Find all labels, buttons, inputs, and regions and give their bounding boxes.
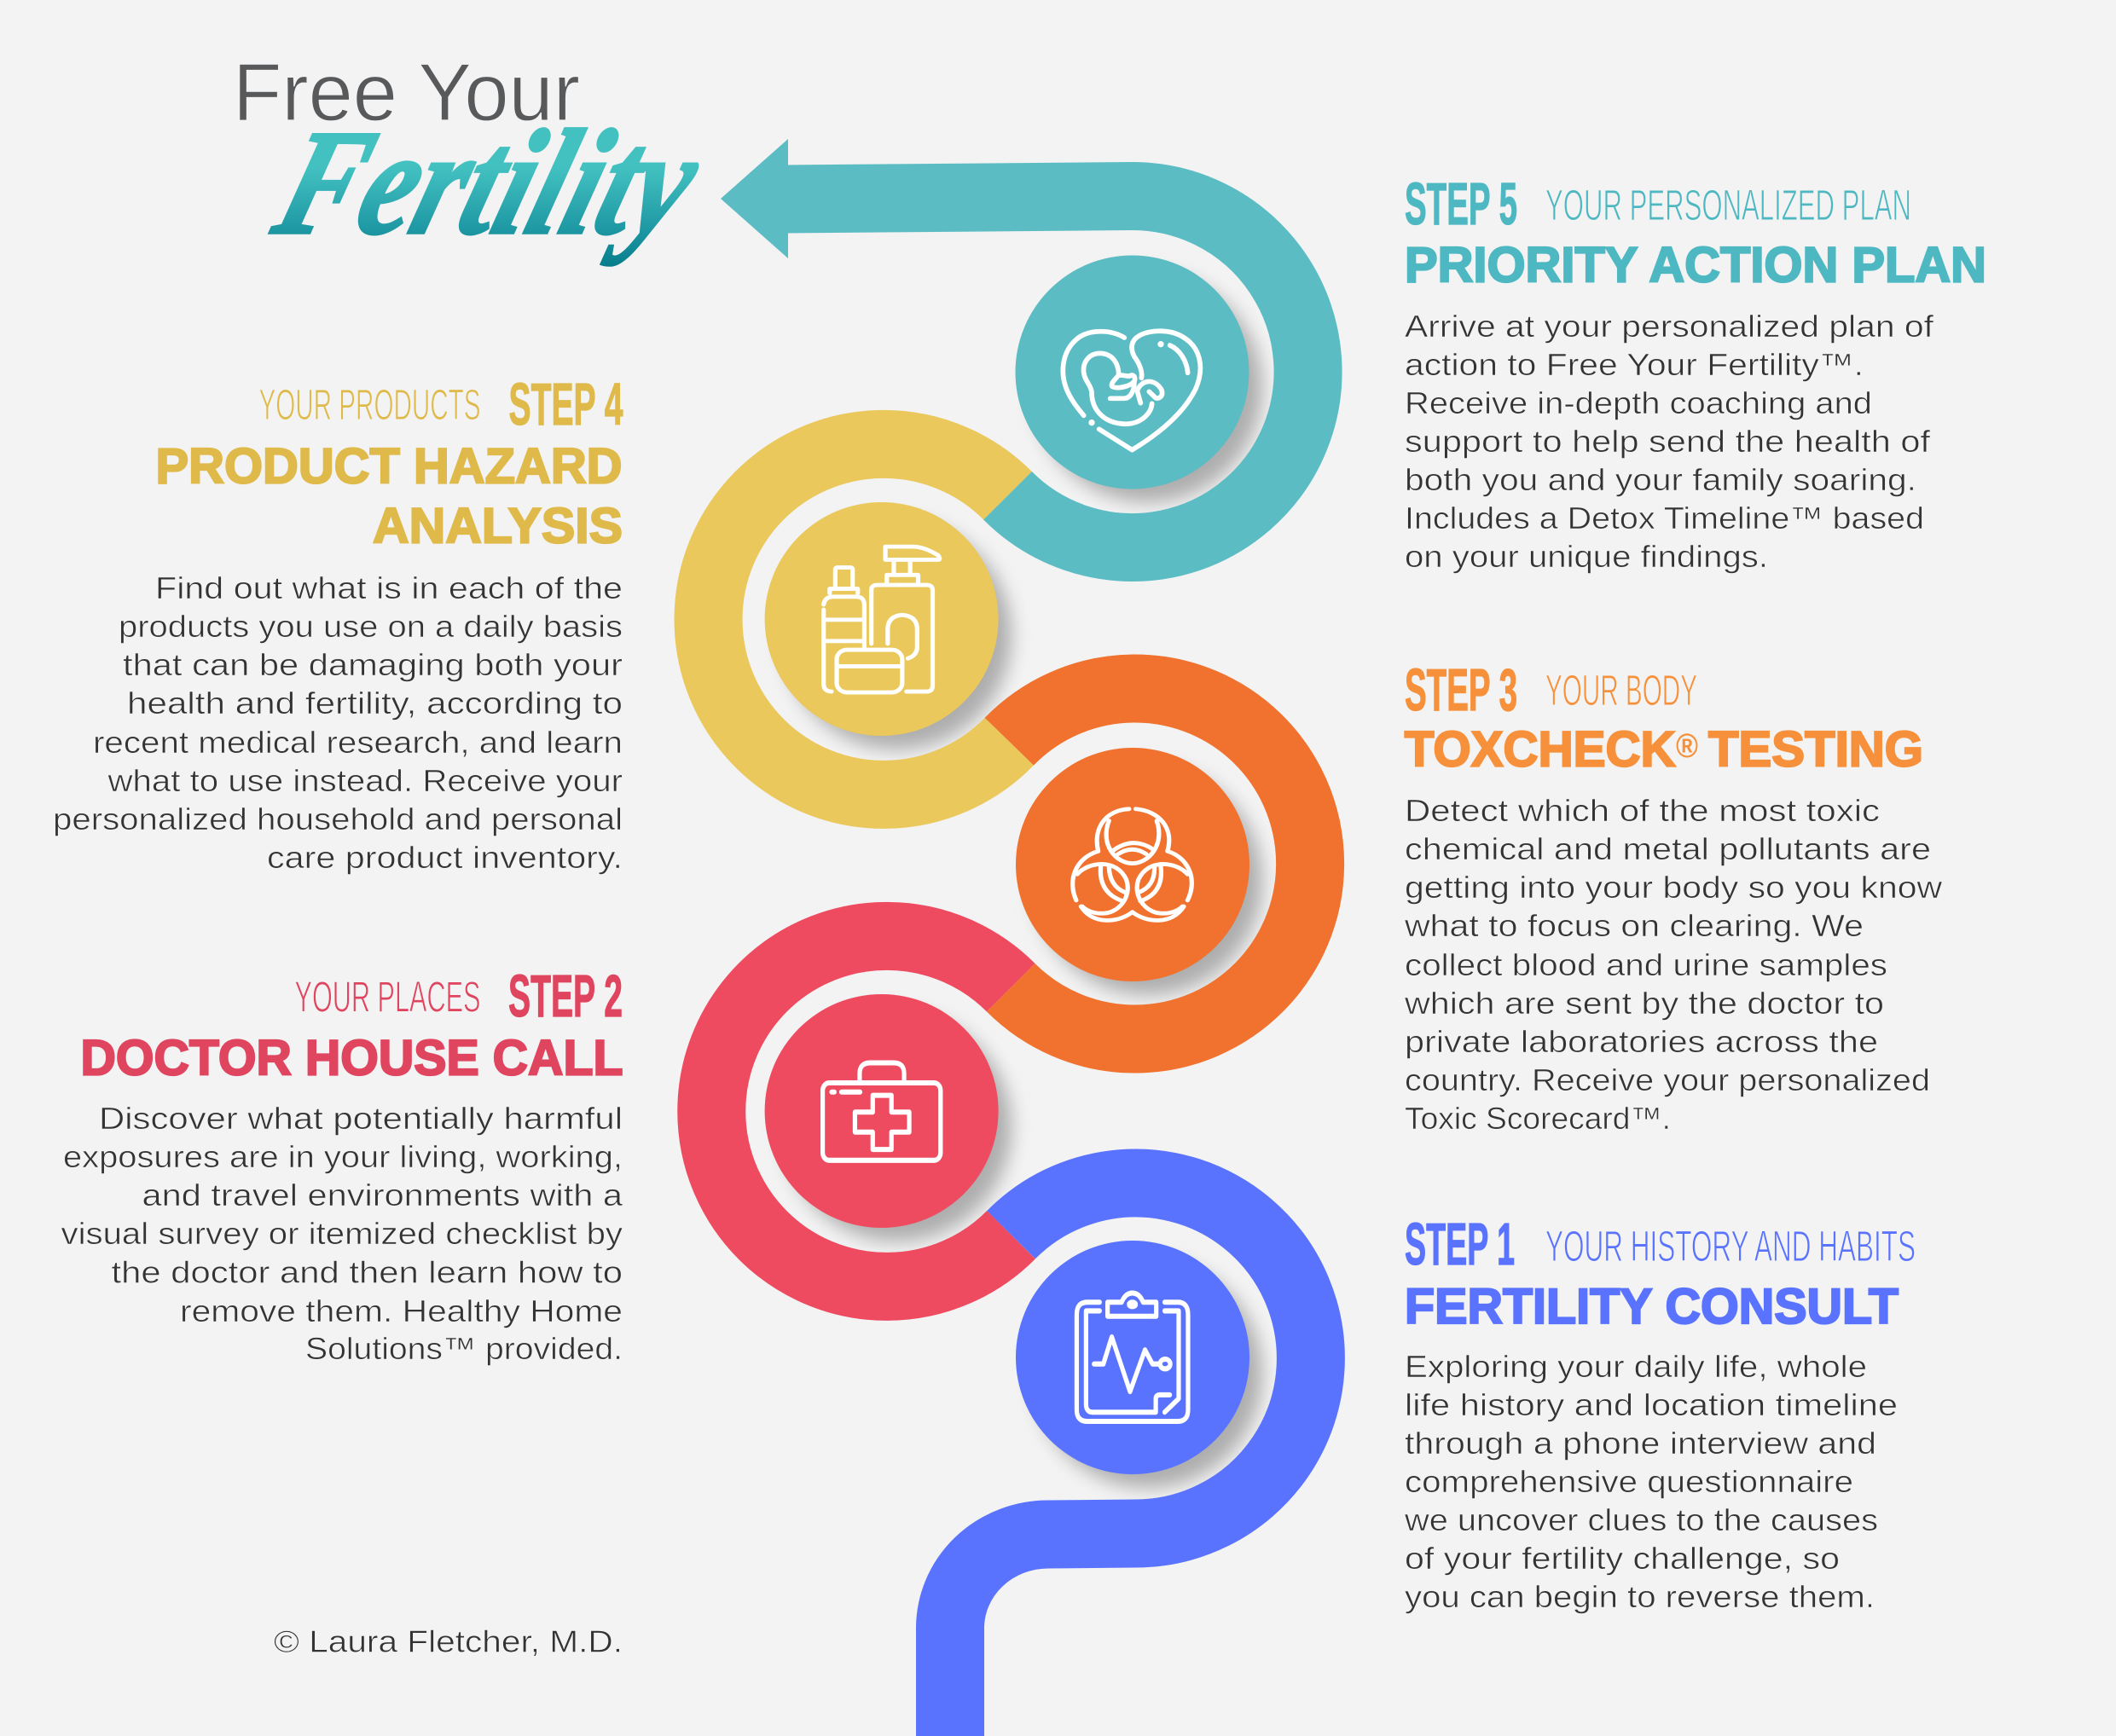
step description: support to help send the health of <box>1405 424 1931 459</box>
step description: Toxic Scorecard™. <box>1405 1101 1671 1136</box>
step description: you can begin to reverse them. <box>1405 1579 1875 1614</box>
path segment: step 3 orange <box>1009 688 1310 1039</box>
step heading: FERTILITY CONSULT <box>1405 1279 1899 1334</box>
step 2 node <box>765 994 999 1228</box>
step label: STEP 1 <box>1405 1211 1515 1277</box>
step 1 node <box>1016 1241 1249 1474</box>
step description: Arrive at your personalized plan of <box>1405 309 1934 344</box>
title line: Free Your: Free Your <box>233 47 580 138</box>
step description: what to focus on clearing. We <box>1404 908 1864 943</box>
path segment: step 1 blue <box>950 1183 1311 1736</box>
step description: remove them. Healthy Home <box>180 1293 623 1328</box>
step description: care product inventory. <box>267 840 623 875</box>
winding path <box>709 139 1311 1736</box>
step description: and travel environments with a <box>142 1178 623 1212</box>
icon: clipboard with heartbeat <box>1076 1293 1188 1421</box>
step heading <box>1405 722 1923 778</box>
step description: recent medical research, and learn <box>93 725 623 760</box>
step label: STEP 4 <box>508 371 623 437</box>
panel: step 1 <box>1404 1211 1916 1614</box>
step description: comprehensive questionnaire <box>1405 1464 1853 1499</box>
step description: private laboratories across the <box>1405 1024 1878 1059</box>
panel: step 5 <box>1405 171 1986 574</box>
step description: Receive in-depth coaching and <box>1405 385 1872 420</box>
step description: Find out what is in each of the <box>155 570 623 605</box>
step heading: ® <box>1676 727 1698 765</box>
step description: chemical and metal pollutants are <box>1405 831 1931 866</box>
step description: on your unique findings. <box>1405 539 1768 574</box>
icon: cosmetic bottles <box>824 547 940 692</box>
step heading: DOCTOR HOUSE CALL <box>80 1031 623 1086</box>
path segment: step 2 red <box>711 936 1012 1287</box>
step description <box>1405 309 1934 574</box>
step category: YOUR PLACES <box>295 973 481 1021</box>
step description: personalized household and personal <box>53 801 623 836</box>
path segment: step 5 teal <box>785 196 1308 547</box>
step description: Includes a Detox Timeline™ based <box>1405 501 1924 535</box>
step description: we uncover clues to the causes <box>1404 1502 1878 1537</box>
step heading: TESTING <box>1708 722 1923 778</box>
step description: products you use on a daily basis <box>119 609 623 644</box>
step description <box>1404 1349 1898 1614</box>
step category: YOUR PRODUCTS <box>259 380 481 429</box>
step description: what to use instead. Receive your <box>107 763 623 798</box>
step heading: PRIORITY ACTION PLAN <box>1405 238 1986 293</box>
step description: country. Receive your personalized <box>1405 1062 1930 1097</box>
step description: the doctor and then learn how to <box>111 1255 623 1290</box>
icon: first aid kit <box>823 1062 941 1160</box>
panel: step 2 <box>61 963 623 1366</box>
path segment: step 4 yellow <box>709 444 1009 795</box>
step heading: ANALYSIS <box>373 498 623 553</box>
step description: Detect which of the most toxic <box>1405 793 1880 828</box>
step description <box>1404 793 1943 1136</box>
step description: of your fertility challenge, so <box>1405 1541 1840 1576</box>
step heading <box>155 438 623 553</box>
title line: Fertility script: Fertility <box>259 100 719 265</box>
step description <box>53 570 623 875</box>
step 3 node <box>1016 748 1249 981</box>
step heading: TOXCHECK <box>1405 722 1676 778</box>
step description: through a phone interview and <box>1405 1426 1876 1461</box>
copyright credit: © Laura Fletcher, M.D. <box>274 1624 623 1659</box>
step description: Solutions™ provided. <box>305 1331 623 1366</box>
step description: exposures are in your living, working, <box>63 1139 623 1174</box>
icon: heart with fetus <box>1063 331 1200 450</box>
step 5 node <box>1015 256 1249 489</box>
step heading: PRODUCT HAZARD <box>155 438 623 494</box>
step category: YOUR BODY <box>1545 666 1697 715</box>
panel: step 4 <box>53 371 623 875</box>
step description: Exploring your daily life, whole <box>1405 1349 1867 1384</box>
step description: which are sent by the doctor to <box>1404 986 1884 1021</box>
step description: health and fertility, according to <box>127 686 623 720</box>
step description <box>61 1101 623 1366</box>
title <box>233 47 719 265</box>
panel: step 3 <box>1404 657 1943 1136</box>
step description: life history and location timeline <box>1405 1387 1898 1422</box>
step label: STEP 5 <box>1405 171 1517 237</box>
step label: STEP 2 <box>508 963 623 1029</box>
step 4 node <box>765 502 999 736</box>
step description: collect blood and urine samples <box>1405 947 1887 982</box>
step label: STEP 3 <box>1405 657 1517 723</box>
step description: both you and your family soaring. <box>1405 462 1916 497</box>
step description: that can be damaging both your <box>123 647 623 682</box>
step description: Discover what potentially harmful <box>99 1101 623 1136</box>
arrow head <box>721 139 788 258</box>
circle drop shadows <box>783 274 1262 1488</box>
step description: action to Free Your Fertility™. <box>1405 347 1864 382</box>
step description: getting into your body so you know <box>1405 870 1943 905</box>
icon: biohazard <box>1073 809 1191 920</box>
step description: visual survey or itemized checklist by <box>61 1216 623 1251</box>
